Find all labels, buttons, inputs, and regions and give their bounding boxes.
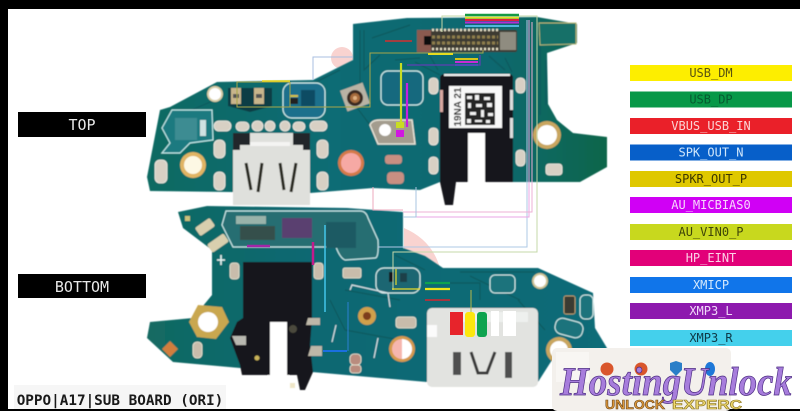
- legend: SPKR_OUT_P: SPKR_OUT_P: [675, 172, 747, 186]
- legend: XMICP: [630, 277, 792, 293]
- orange S logo: [162, 341, 178, 357]
- dark traces bottom: [330, 255, 545, 340]
- legend: AU_MICBIAS0: AU_MICBIAS0: [671, 198, 751, 212]
- legend: HP_EINT: HP_EINT: [686, 251, 736, 265]
- panel label: BOTTOM: BOTTOM: [55, 278, 109, 296]
- legend: VBUS_USB_IN: [630, 118, 792, 134]
- outlined pad upper right: [539, 23, 576, 45]
- pads around jack: [193, 263, 416, 373]
- audio jack top: [440, 74, 513, 205]
- pale red watermark shapes: [331, 47, 445, 372]
- title: [14, 385, 226, 409]
- tray icons: [600, 361, 715, 376]
- legend: USB_DM: [630, 65, 792, 81]
- panel label: TOP: [18, 112, 146, 137]
- white stray traces: [332, 285, 390, 358]
- chip outline near usb bottom: [376, 268, 420, 293]
- QR sticker: [449, 86, 502, 128]
- legend: SPK_OUT_N: SPK_OUT_N: [678, 146, 744, 160]
- usb color-coded pins: [450, 311, 516, 337]
- coloured signal traces: [247, 15, 519, 351]
- legend: USB_DP: USB_DP: [689, 92, 733, 106]
- board outline bottom: [147, 206, 607, 382]
- chip zone centre: [283, 83, 325, 118]
- legend: AU_MICBIAS0: [630, 197, 792, 213]
- legend: [630, 65, 792, 346]
- title: OPPO|A17|SUB BOARD (ORI): [17, 393, 223, 409]
- legend: HP_EINT: [630, 250, 792, 266]
- small pads upper left: [185, 216, 229, 253]
- legend: VBUS_USB_IN: VBUS_USB_IN: [671, 119, 751, 133]
- silver bracket: [370, 120, 415, 144]
- QR sticker: 19NA 21: [453, 87, 464, 127]
- outlined chip zone bottom: [222, 211, 378, 260]
- legend: USB_DP: [630, 92, 792, 108]
- dark copper traces top: [180, 25, 546, 125]
- coax connector: [340, 83, 370, 111]
- audio jack bottom: [230, 262, 322, 390]
- board: top side: [147, 17, 607, 205]
- connector block top: [417, 30, 517, 52]
- legend: AU_VIN0_P: AU_VIN0_P: [678, 225, 744, 239]
- board: bottom side: [147, 206, 607, 390]
- legend: USB_DM: USB_DM: [689, 66, 733, 80]
- plus mark: [217, 255, 225, 265]
- panel label: TOP: TOP: [68, 116, 96, 134]
- legend: AU_VIN0_P: [630, 224, 792, 240]
- legend: XMP3_L: XMP3_L: [689, 304, 733, 318]
- legend: XMP3_R: XMP3_R: [689, 331, 733, 345]
- legend: XMP3_L: [630, 303, 792, 319]
- watermark panel: [552, 348, 792, 411]
- small inductor: [385, 155, 404, 184]
- board outline top: [147, 17, 607, 193]
- legend: XMICP: XMICP: [693, 278, 729, 292]
- pill pads row: [155, 78, 562, 190]
- mounting holes bottom board: [358, 273, 572, 363]
- legend: SPK_OUT_N: [630, 144, 792, 160]
- usb connector bottom: [427, 308, 538, 387]
- gold mount hole: [189, 305, 229, 339]
- legend: XMP3_R: [630, 330, 792, 346]
- small chip outlines right: [490, 275, 593, 339]
- lime and magenta test pads: [396, 122, 404, 137]
- white outlined chip zone right: [381, 71, 423, 105]
- mounting holes top board: [180, 86, 561, 178]
- white outlined chip zone left: [162, 110, 213, 153]
- small dark component right: [564, 296, 575, 314]
- probe wires between boards: [237, 16, 537, 312]
- panel label: BOTTOM: [18, 274, 146, 298]
- usb connector top: [233, 133, 310, 205]
- legend: SPKR_OUT_P: [630, 171, 792, 187]
- small black camera pads: [228, 88, 272, 112]
